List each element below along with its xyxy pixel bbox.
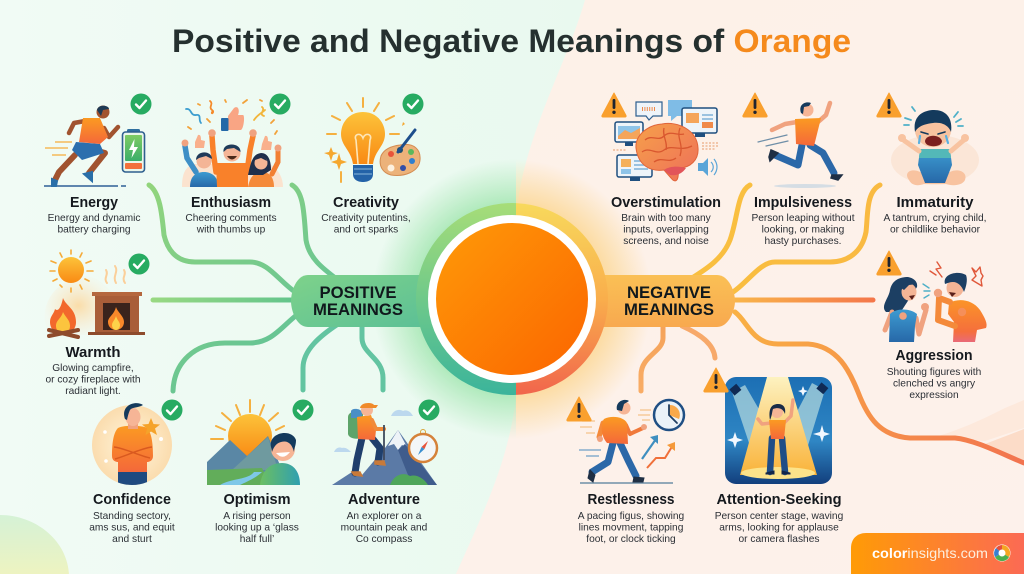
text: Energy description: Energy and dynamic (48, 213, 140, 224)
panel: Warmth (45, 250, 150, 397)
text: Confidence description: Standing sectory, (93, 511, 171, 522)
panel: Energy (44, 94, 152, 236)
text: Attention-Seeking description: arms, looking for applause (719, 522, 839, 534)
text: Impulsiveness description: looking, or making (762, 224, 845, 236)
pill: negative meanings (600, 275, 735, 327)
heading: Enthusiasm: Enthusiasm (191, 194, 271, 211)
text: Restlessness description: lines movment, tapping (579, 522, 684, 534)
badge: check (292, 400, 314, 420)
text: Warmth description: Glowing campfire, (52, 363, 134, 374)
badge: check (402, 94, 424, 114)
text: Attention-Seeking description: Person center stage, waving (715, 511, 844, 522)
badge: warning (743, 93, 767, 117)
panel: Optimism (207, 400, 314, 545)
badge: warning (877, 93, 901, 117)
text: Impulsiveness description: Person leaping without (751, 213, 855, 224)
footer badge: colorinsights.com (851, 533, 1024, 574)
text: Confidence description: and sturt (112, 534, 152, 545)
text: Adventure description: An explorer on a (347, 511, 422, 522)
panel: Adventure (332, 400, 440, 545)
icon: sunrise and smiling person (207, 400, 300, 485)
text: Immaturity description: or childlike behavior (890, 224, 981, 236)
icon: brain with screens and noise (613, 100, 718, 181)
pill: positive meanings: POSITIVE (320, 284, 396, 302)
pill: negative meanings: MEANINGS (624, 301, 714, 319)
badge: warning (567, 397, 591, 421)
icon: two shouting figures (884, 262, 987, 342)
heading: Confidence: Confidence (93, 491, 171, 508)
text: Energy description: battery charging (57, 224, 131, 236)
panel: Aggression (877, 251, 987, 401)
heading: Creativity: Creativity (333, 194, 400, 211)
text: Warmth description: radiant light. (65, 386, 121, 397)
icon: light bulb and palette (324, 98, 420, 182)
badge: check (128, 254, 150, 274)
badge: check (270, 94, 290, 114)
icon: runner and battery (44, 106, 144, 186)
text: Restlessness description: A pacing figus, showing (578, 511, 685, 522)
text: Aggression description: clenched vs angry (893, 378, 976, 390)
panel: Immaturity (877, 93, 987, 236)
icon: person on spotlight stage (725, 377, 832, 484)
text: Aggression description: Shouting figures with (887, 367, 981, 378)
negative branches (641, 185, 1024, 463)
badge: warning (602, 93, 626, 117)
text: Impulsiveness description: hasty purchases. (764, 236, 842, 247)
badge: check (418, 400, 440, 420)
panel: Creativity (321, 94, 424, 236)
positive branches (149, 185, 383, 391)
icon: leaping person (758, 102, 842, 188)
panel: Restlessness (567, 397, 685, 545)
icon: confident person with crossed arms (92, 403, 172, 486)
text: Creativity description: and ort sparks (334, 224, 398, 236)
badge: check (130, 94, 152, 114)
text: Optimism description: looking up a ‘glass (215, 522, 299, 534)
heading: Impulsiveness: Impulsiveness (754, 194, 852, 211)
icon: pacing person, clock and arrows (579, 400, 684, 483)
heading: Warmth: Warmth (66, 344, 120, 361)
text: Adventure description: Co compass (356, 534, 412, 545)
text: Enthusiasm description: Cheering comments (185, 213, 277, 224)
heading: Overstimulation: Overstimulation (611, 194, 721, 211)
text: Adventure description: mountain peak and (341, 522, 428, 534)
text: Creativity description: Creativity putentins, (321, 213, 411, 224)
central orange circle with split ring (291, 159, 735, 439)
text: Restlessness description: foot, or clock ticking (586, 534, 676, 545)
heading: Adventure: Adventure (348, 491, 420, 508)
text: Overstimulation description: inputs, overlapping (623, 224, 709, 236)
text: Aggression description: expression (909, 390, 959, 401)
badge: warning (877, 251, 901, 275)
text: Attention-Seeking description: or camera flashes (739, 534, 819, 545)
text: Optimism description: A rising person (223, 511, 291, 522)
icon: explorer on mountain with compass (332, 403, 437, 485)
panel: Enthusiasm (182, 94, 290, 236)
pill: positive meanings: MEANINGS (313, 301, 403, 319)
panel: Confidence (89, 400, 182, 545)
text: Overstimulation description: Brain with too many (621, 213, 712, 224)
text: Immaturity description: A tantrum, crying child, (883, 213, 987, 224)
heading: Restlessness: Restlessness (588, 491, 674, 508)
pill: positive meanings (291, 275, 425, 327)
heading: Energy: Energy (70, 194, 119, 211)
panel: Overstimulation (602, 93, 721, 247)
panel: Attention-Seeking (704, 368, 844, 545)
icon: crying child (891, 107, 979, 185)
text: Overstimulation description: screens, and noise (623, 236, 709, 247)
icon: sun, campfire and fireplace (45, 250, 145, 337)
text: Optimism description: half full’ (240, 534, 274, 545)
heading: Optimism: Optimism (224, 491, 290, 508)
heading: Immaturity: Immaturity (896, 194, 974, 211)
heading: Attention-Seeking: Attention-Seeking (716, 491, 842, 508)
footer badge: colorinsights.com: colorinsights.com (872, 545, 988, 561)
pill: negative meanings: NEGATIVE (627, 284, 711, 302)
heading: Aggression: Aggression (896, 347, 972, 364)
badge: check (162, 400, 182, 420)
badge: warning (704, 368, 728, 392)
text: Enthusiasm description: with thumbs up (196, 224, 266, 236)
panel: Impulsiveness (743, 93, 855, 247)
icon: colour wheel (994, 544, 1010, 562)
text: Confidence description: ams sus, and equit (89, 522, 175, 534)
title: Positive and Negative Meanings of Orange (172, 23, 851, 59)
text: Warmth description: or cozy fireplace with (45, 374, 141, 386)
icon: cheering crowd with thumbs up (182, 100, 283, 187)
